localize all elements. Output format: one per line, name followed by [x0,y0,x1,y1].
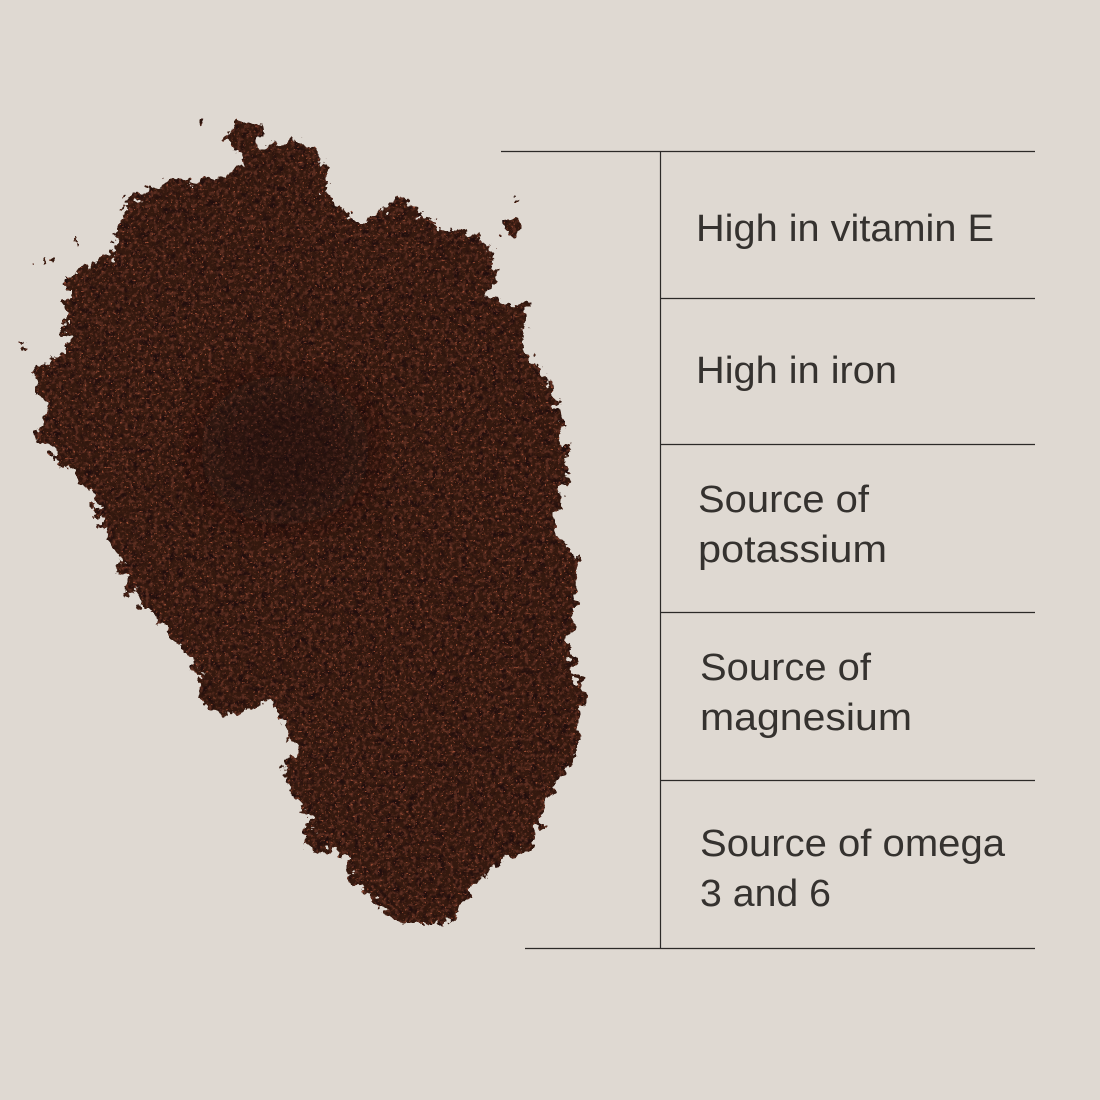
table rules [501,151,1035,948]
benefit: vitamin E: High in vitamin E [696,208,994,250]
benefit: omega 3 and 6 [700,823,1006,915]
benefit: potassium [698,479,887,571]
benefit: omega 3 and 6: Source of omega [700,823,1006,865]
benefit: omega 3 and 6: 3 and 6 [700,873,831,915]
benefit: magnesium: Source of [700,647,871,689]
benefit: potassium: Source of [698,479,869,521]
benefit: magnesium: magnesium [700,697,912,739]
benefit: potassium: potassium [698,529,887,571]
benefit: magnesium [700,647,912,739]
benefit: iron: High in iron [696,350,897,392]
powder swatch [18,119,584,924]
